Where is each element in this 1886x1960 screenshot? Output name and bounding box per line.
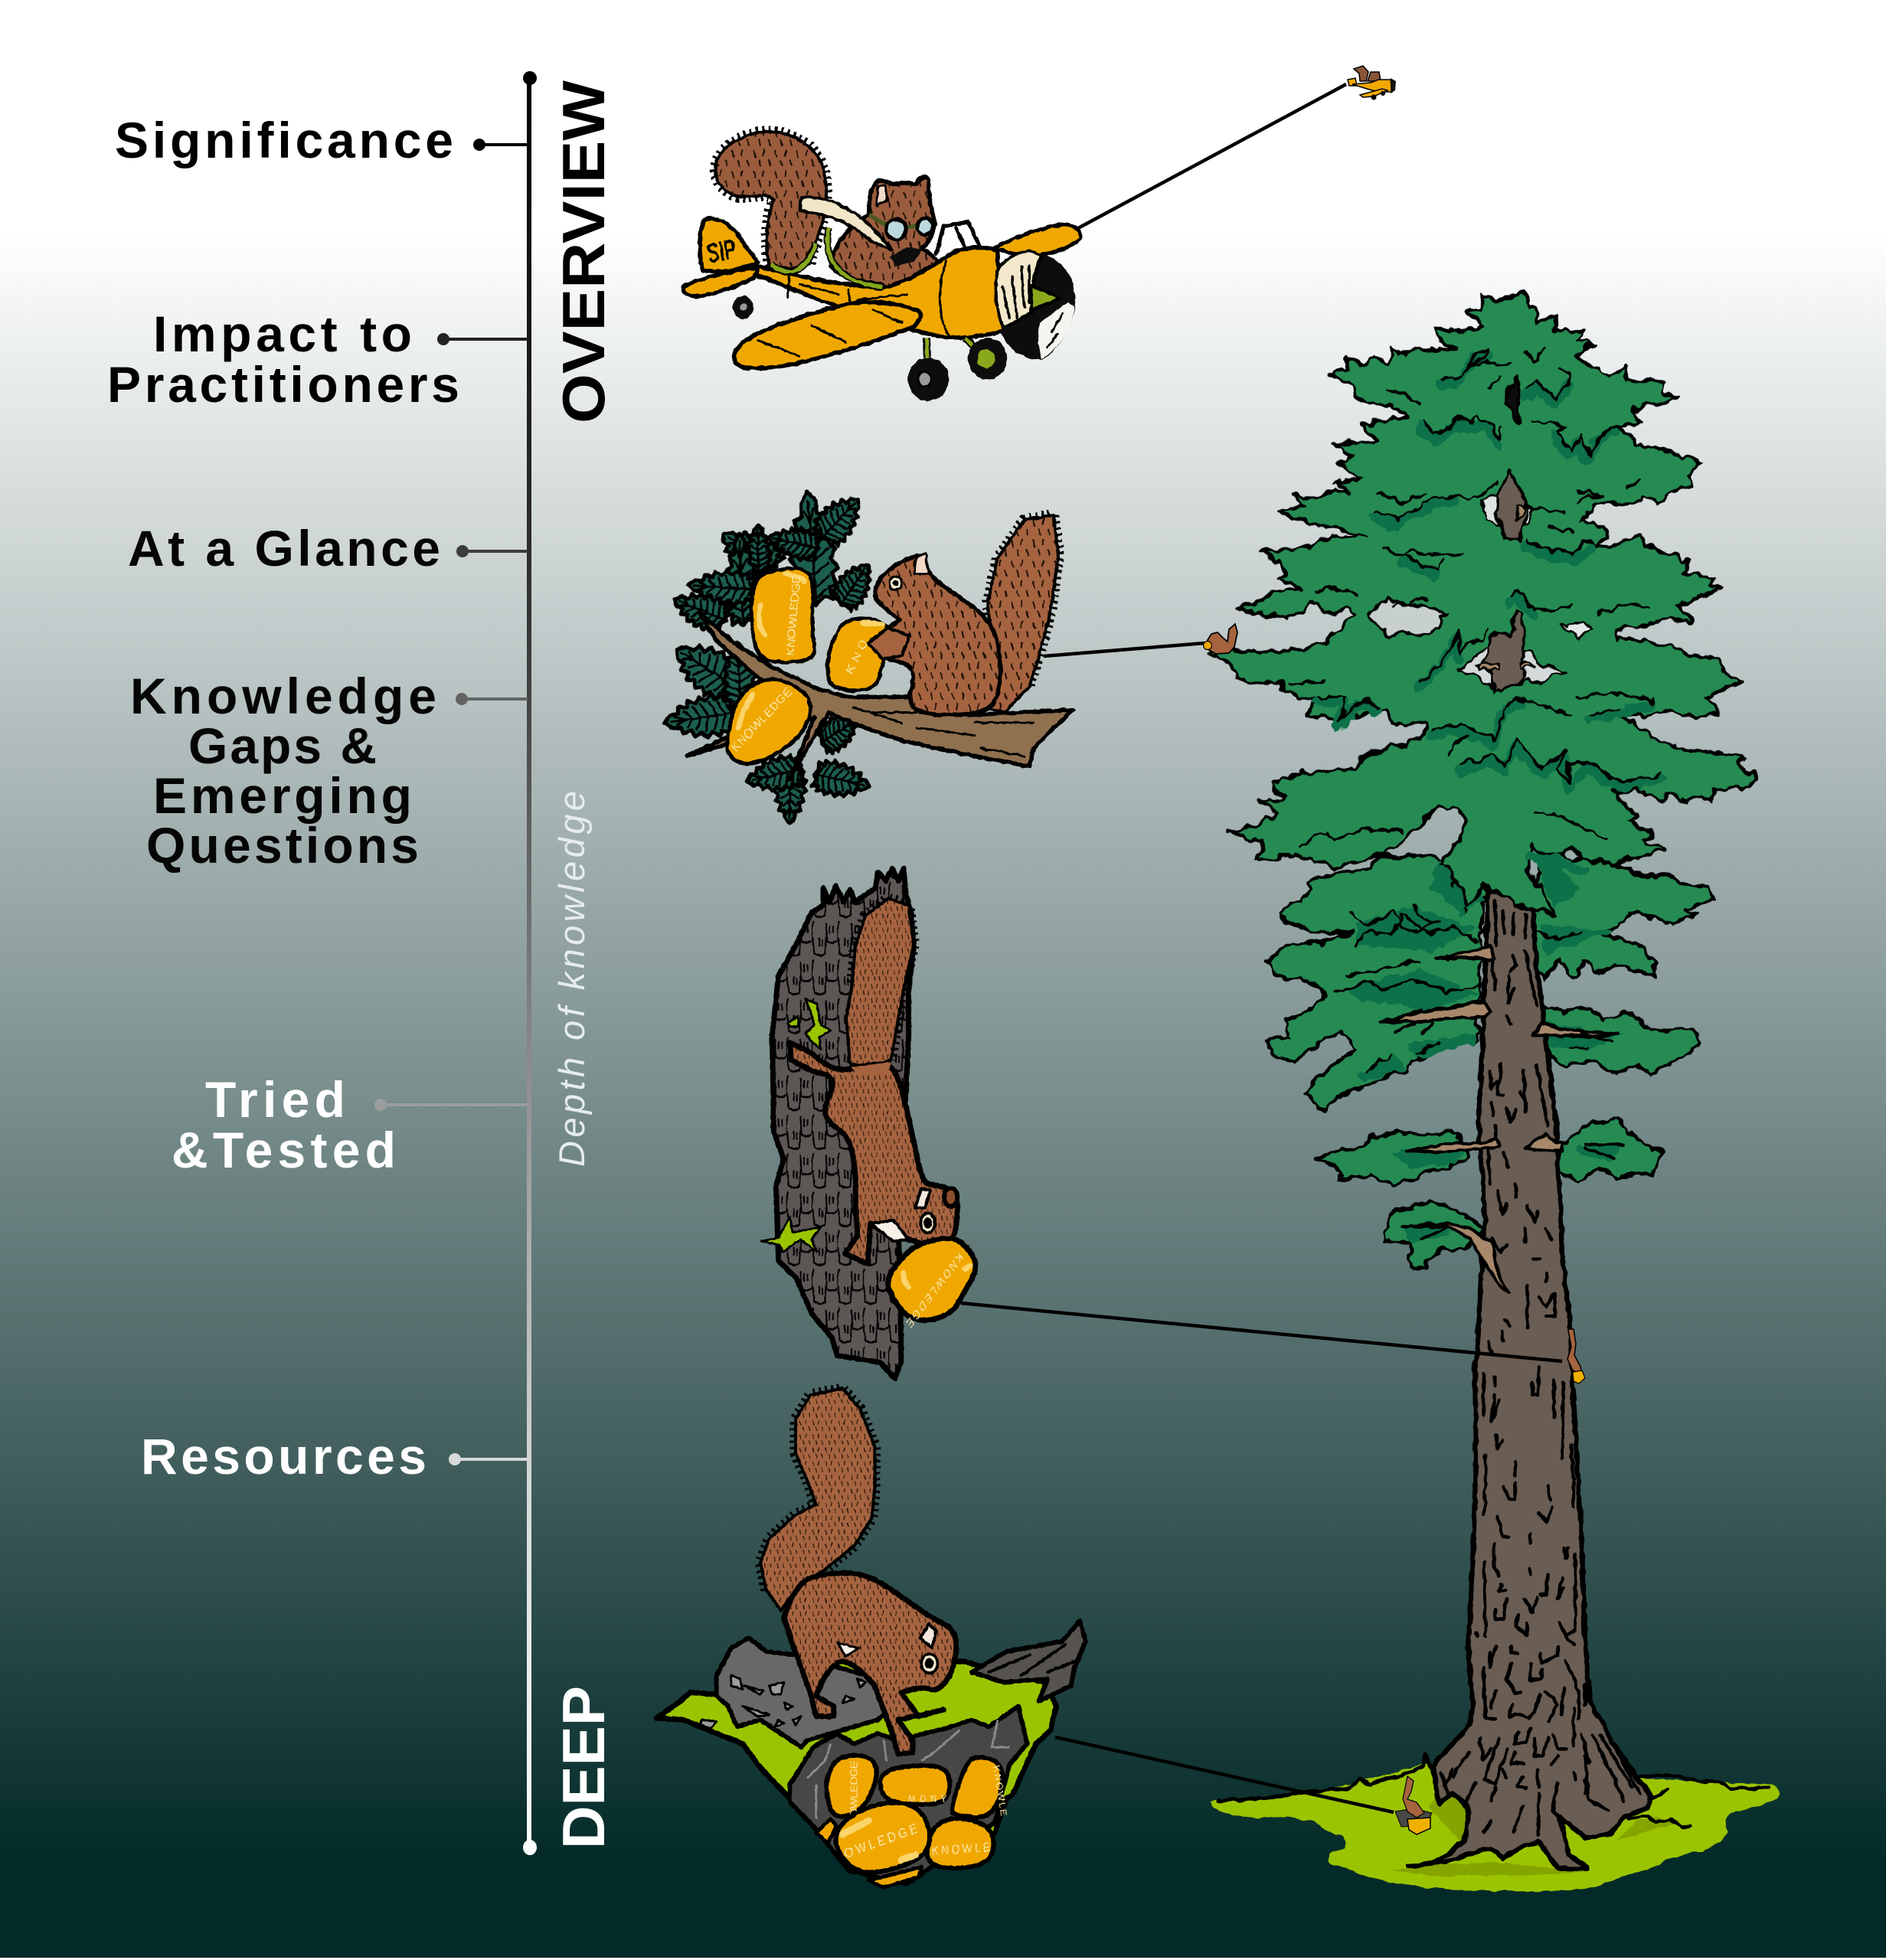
knowledge lump: KNOWLEDGE	[904, 1250, 965, 1331]
tail plane	[683, 267, 758, 296]
illustration: plane squirrel	[683, 132, 1080, 400]
label: Knowledge Gaps & Emerging Questions: Knowledge	[130, 668, 436, 724]
knowledge lumps: KNOWLEDGE	[729, 685, 795, 755]
mini plane squirrel	[1348, 66, 1396, 100]
illustration: branch squirrel	[660, 486, 1073, 824]
squirrel body	[784, 1573, 956, 1754]
connector lines	[961, 84, 1562, 1812]
label: Tried & Tested: Tried	[205, 1071, 345, 1128]
far wing	[992, 224, 1080, 257]
label: Impact to Practitioners: Practitioners	[107, 356, 459, 413]
plane fuselage	[756, 248, 1004, 338]
tail fin	[700, 219, 758, 272]
foliage gaps showing trunk	[1369, 599, 1445, 636]
label: Knowledge Gaps & Emerging Questions	[130, 668, 436, 874]
bark slab	[772, 868, 914, 1378]
squirrel pilot	[832, 177, 937, 288]
mini branch squirrel	[1204, 624, 1237, 654]
mini ground squirrel	[1395, 1776, 1432, 1834]
label: Resources: Resources	[141, 1428, 427, 1485]
label: Knowledge Gaps & Emerging Questions: Questions	[146, 817, 419, 874]
depth of knowledge axis	[374, 71, 537, 1855]
tail lettering SIP: SIP	[704, 233, 739, 270]
windscreen	[936, 222, 980, 253]
knowledge lumps: KNOWLEDGE	[784, 575, 803, 656]
upper trunk bark and branches	[1381, 900, 1623, 1351]
cockpit rims and panel lines	[771, 228, 883, 287]
squirrel body	[875, 554, 1000, 715]
branch	[687, 612, 1073, 779]
knowledge lumps: KNO	[844, 638, 871, 676]
wheels	[733, 296, 1007, 400]
label: Impact to Practitioners: Impact to	[153, 305, 412, 362]
moss	[762, 998, 831, 1252]
knowledge lumps	[816, 1756, 1008, 1887]
squirrel tail	[760, 1388, 874, 1611]
moss patch	[656, 1655, 1057, 1884]
label: Tried & Tested: &Tested	[172, 1122, 396, 1178]
label: At a Glance: At a Glance	[128, 520, 440, 577]
label: Tried & Tested	[172, 1071, 396, 1178]
label: Impact to Practitioners	[107, 305, 459, 413]
mini bark squirrel	[1567, 1329, 1585, 1383]
scarf	[799, 197, 892, 250]
ground: moss	[1210, 1754, 1780, 1891]
squirrel body	[790, 1043, 957, 1264]
lower foliage lobes	[1266, 849, 1714, 1268]
illustration: ground squirrel	[656, 1388, 1086, 1887]
heading: OVERVIEW: OVERVIEW	[550, 80, 617, 423]
foliage ink lines	[1289, 348, 1662, 847]
squirrel tail	[846, 898, 914, 1067]
illustration: tree	[1210, 291, 1780, 1891]
upper foliage	[1210, 291, 1757, 915]
illustration: bark squirrel	[762, 868, 976, 1378]
knowledge lumps: OWLEDGE	[842, 1821, 919, 1861]
squirrel paw	[868, 628, 910, 658]
heading: DEEP: DEEP	[550, 1686, 617, 1849]
branches	[1381, 946, 1494, 1021]
soil pit	[789, 1707, 1027, 1884]
knowledge lumps: OWLEDGE	[848, 1761, 859, 1818]
rock pile	[701, 1638, 898, 1747]
caption: Depth of knowledge: Depth of knowledge	[551, 791, 592, 1167]
label: Knowledge Gaps & Emerging Questions: Gaps &	[188, 717, 377, 774]
right bark slab	[972, 1621, 1086, 1701]
tree trunk	[1407, 884, 1652, 1869]
foliage shadow lines	[1316, 355, 1659, 905]
bark marks	[1440, 1366, 1640, 1834]
lower wing	[734, 302, 920, 368]
squirrel tail	[985, 515, 1058, 712]
knowledge lumps	[727, 568, 890, 763]
propeller blur	[1000, 253, 1075, 360]
label: Significance: Significance	[115, 112, 453, 168]
knowledge lumps: KNOWLE	[931, 1841, 991, 1858]
squirrel tail	[715, 132, 826, 268]
engine cowl	[996, 251, 1061, 328]
pine sprigs	[660, 486, 881, 824]
label: Knowledge Gaps & Emerging Questions: Emerging	[153, 767, 412, 824]
knowledge lumps: KNOWLE	[992, 1765, 1008, 1817]
struts	[927, 338, 985, 364]
knowledge lumps: MONY	[908, 1794, 946, 1805]
knowledge lump	[888, 1239, 976, 1331]
